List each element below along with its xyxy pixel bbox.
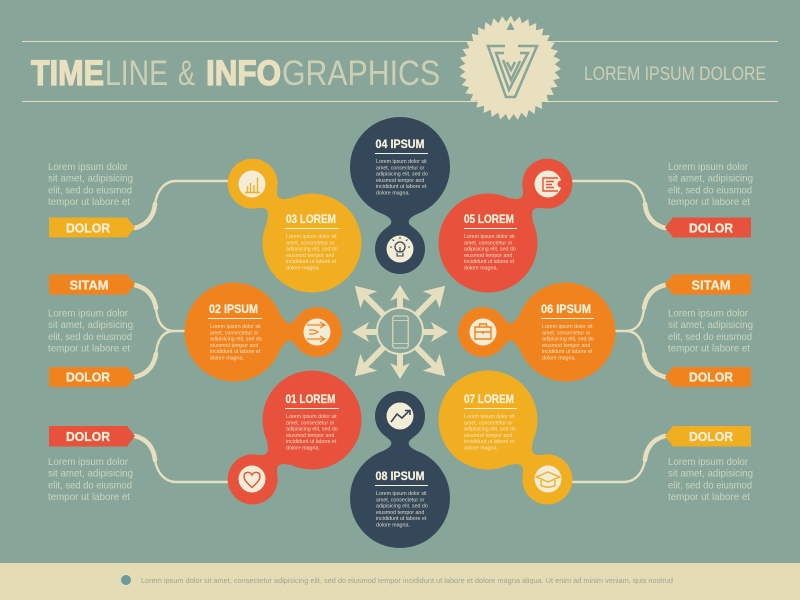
text: 05 lorem: adipisicing elit, sed do [464, 246, 516, 252]
text: left block 2: Lorem ipsum dolor [48, 308, 128, 320]
text: 07 lorem: adipisicing elit, sed do [464, 426, 516, 432]
text: left block 1: elit, sed do eiusmod [48, 185, 132, 196]
text: 05 lorem: amet, consectetur or [464, 240, 513, 246]
text: 06 ipsum: amet, consectetur or [542, 330, 591, 336]
connector: middle left [135, 285, 186, 377]
title: & [178, 54, 195, 93]
text: 05 lorem: dolore magna. [464, 265, 498, 271]
panel: 04 ipsum [350, 117, 450, 274]
text: left block 1: Lorem ipsum dolor [48, 162, 128, 173]
text: left block 3: Lorem ipsum dolor [48, 457, 128, 468]
text: 01 lorem: Lorem ipsum dolor sit [286, 414, 337, 420]
text: left block 3: tempor ut labore et [48, 492, 130, 503]
text: 08 ipsum: adipisicing elit, sed do [376, 504, 428, 510]
text: 06 ipsum: incididunt ut labore et [542, 349, 593, 355]
text: 02 ipsum: incididunt ut labore et [210, 349, 261, 355]
tag: right dolor orange [665, 367, 751, 387]
text: 04 ipsum: amet, consectetur or [376, 165, 425, 171]
title: LINE [105, 54, 168, 93]
text: 06 ipsum: eiusmod tempor and [542, 343, 590, 349]
text: right block 3: sit amet, adipisicing [668, 469, 753, 480]
icon: bar chart [238, 170, 266, 198]
text: 07 lorem: Lorem ipsum dolor sit [464, 414, 515, 420]
icon: crossing arrows [304, 318, 330, 346]
text: right block 2: Lorem ipsum dolor [668, 308, 748, 320]
text: right block 3: Lorem ipsum dolor [668, 457, 748, 468]
connector: top right [570, 181, 665, 228]
text: left block 1: tempor ut labore et [48, 197, 130, 208]
title: INFO [206, 54, 281, 93]
tag: left dolor yellow: DOLOR [66, 220, 111, 236]
text: 08 ipsum: dolore magna. [376, 522, 410, 528]
heading: 07 lorem: 07 LOREM [464, 394, 514, 406]
panel: 06 ipsum [458, 282, 616, 382]
text: 03 lorem: eiusmod tempor and [286, 253, 334, 259]
text: right block 1: Lorem ipsum dolor [668, 162, 748, 173]
text: left block 3: elit, sed do eiusmod [48, 480, 132, 491]
tag: left dolor orange: DOLOR [66, 370, 111, 384]
text: 06 ipsum: dolore magna. [542, 355, 576, 361]
text: left block 3: sit amet, adipisicing [48, 469, 133, 480]
tag: right dolor orange: DOLOR [689, 370, 734, 384]
tag: left dolor orange [49, 367, 135, 387]
title: GRAPHICS [282, 54, 440, 93]
tag: right dolor yellow: DOLOR [689, 429, 734, 444]
text: 08 ipsum: eiusmod tempor and [376, 510, 424, 516]
title: TIME [31, 54, 104, 93]
text: 06 ipsum: adipisicing elit, sed do [542, 336, 594, 342]
text: 04 ipsum: adipisicing elit, sed do [376, 172, 428, 178]
text: 04 ipsum: incididunt ut labore et [376, 184, 427, 190]
text: 01 lorem: incididunt ut labore et [286, 439, 337, 445]
tag: left sitam orange: SITAM [70, 278, 108, 292]
heading: 03 lorem: 03 LOREM [286, 214, 336, 226]
tag: right sitam orange [665, 274, 751, 294]
icon: heart [238, 466, 266, 492]
heading: 02 ipsum: 02 IPSUM [209, 304, 258, 316]
text: right block 2: tempor ut labore et [668, 344, 750, 355]
text: 01 lorem: adipisicing elit, sed do [286, 426, 338, 432]
text: left block 2: sit amet, adipisicing [48, 320, 133, 331]
text: right block 2: sit amet, adipisicing [668, 320, 753, 331]
panel: 03 lorem [200, 131, 382, 313]
text: 01 lorem: dolore magna. [286, 445, 320, 451]
text: 04 ipsum: Lorem ipsum dolor sit [376, 159, 427, 165]
tag: left dolor yellow [49, 218, 135, 238]
text: 03 lorem: amet, consectetur or [286, 240, 335, 246]
text: 05 lorem: eiusmod tempor and [464, 253, 512, 259]
tag: right sitam orange: SITAM [692, 278, 730, 292]
icon: trend arrow [386, 402, 414, 430]
footer text: Lorem ipsum dolor sit amet, consectetur adipisicing elit, sed do eiusmod tempor incididunt ut labore et dolore magna aliqua. Ut enim ad minim veniam, quis nostrud [141, 576, 673, 585]
text: 02 ipsum: amet, consectetur or [210, 330, 259, 336]
text: 01 lorem: amet, consectetur or [286, 420, 335, 426]
text: right block 3: tempor ut labore et [668, 492, 750, 503]
heading: 05 lorem: 05 LOREM [464, 214, 514, 226]
icon: central phone with radiating arrows [346, 277, 454, 385]
text: left block 1: sit amet, adipisicing [48, 174, 133, 185]
icon: light bulb [386, 236, 414, 262]
text: left block 2: tempor ut labore et [48, 344, 130, 355]
text: 07 lorem: incididunt ut labore et [464, 439, 515, 445]
text: left block 2: elit, sed do eiusmod [48, 332, 132, 343]
text: 02 ipsum: dolore magna. [210, 355, 244, 361]
text: 07 lorem: amet, consectetur or [464, 420, 513, 426]
text: 04 ipsum: eiusmod tempor and [376, 178, 424, 184]
text: right block 2: elit, sed do eiusmod [668, 332, 752, 343]
text: 01 lorem: eiusmod tempor and [286, 433, 334, 439]
icon: briefcase [470, 318, 496, 346]
icon: graduation cap [534, 466, 562, 492]
heading: 08 ipsum: 08 IPSUM [376, 471, 424, 483]
text: 07 lorem: eiusmod tempor and [464, 433, 512, 439]
text: right block 1: tempor ut labore et [668, 197, 750, 208]
tag: right dolor red: DOLOR [689, 220, 734, 236]
text: 03 lorem: adipisicing elit, sed do [286, 246, 338, 252]
panel: 01 lorem [200, 350, 382, 532]
text: 04 ipsum: dolore magna. [376, 190, 410, 196]
tag: left dolor red: DOLOR [66, 429, 111, 444]
text: right block 1: elit, sed do eiusmod [668, 185, 752, 196]
text: 02 ipsum: Lorem ipsum dolor sit [210, 324, 261, 330]
connector: top left [135, 181, 230, 228]
heading: 06 ipsum: 06 IPSUM [541, 304, 591, 316]
tag: right dolor yellow [665, 426, 751, 446]
text: 07 lorem: dolore magna. [464, 445, 498, 451]
text: 02 ipsum: adipisicing elit, sed do [210, 336, 262, 342]
icon: logo badge [459, 15, 561, 121]
tag: left sitam orange [49, 274, 135, 294]
tag: right dolor red [665, 218, 751, 238]
panel: 02 ipsum [184, 282, 342, 382]
footer bar [0, 563, 800, 600]
connector: bottom left [135, 436, 230, 482]
text: right block 3: elit, sed do eiusmod [668, 480, 752, 491]
panel: 05 lorem [418, 131, 600, 313]
text: 08 ipsum: Lorem ipsum dolor sit [376, 491, 427, 497]
connector: middle right [614, 285, 665, 377]
heading: 04 ipsum: 04 IPSUM [376, 139, 424, 151]
text: 08 ipsum: incididunt ut labore et [376, 516, 427, 522]
connector: bottom right [570, 436, 665, 482]
text: 03 lorem: Lorem ipsum dolor sit [286, 234, 337, 240]
text: 03 lorem: dolore magna. [286, 265, 320, 271]
text: 08 ipsum: amet, consectetur or [376, 497, 425, 503]
panel: 08 ipsum [350, 391, 450, 548]
title [31, 54, 440, 93]
icon: document [534, 170, 564, 198]
text: 02 ipsum: eiusmod tempor and [210, 343, 258, 349]
text: 05 lorem: incididunt ut labore et [464, 259, 515, 265]
tag: left dolor red [49, 426, 135, 446]
text: 03 lorem: incididunt ut labore et [286, 259, 337, 265]
heading: 01 lorem: 01 LOREM [286, 394, 336, 406]
text: right block 1: sit amet, adipisicing [668, 174, 753, 185]
text: 05 lorem: Lorem ipsum dolor sit [464, 234, 515, 240]
panel: 07 lorem [418, 350, 600, 532]
text: 06 ipsum: Lorem ipsum dolor sit [542, 324, 593, 330]
